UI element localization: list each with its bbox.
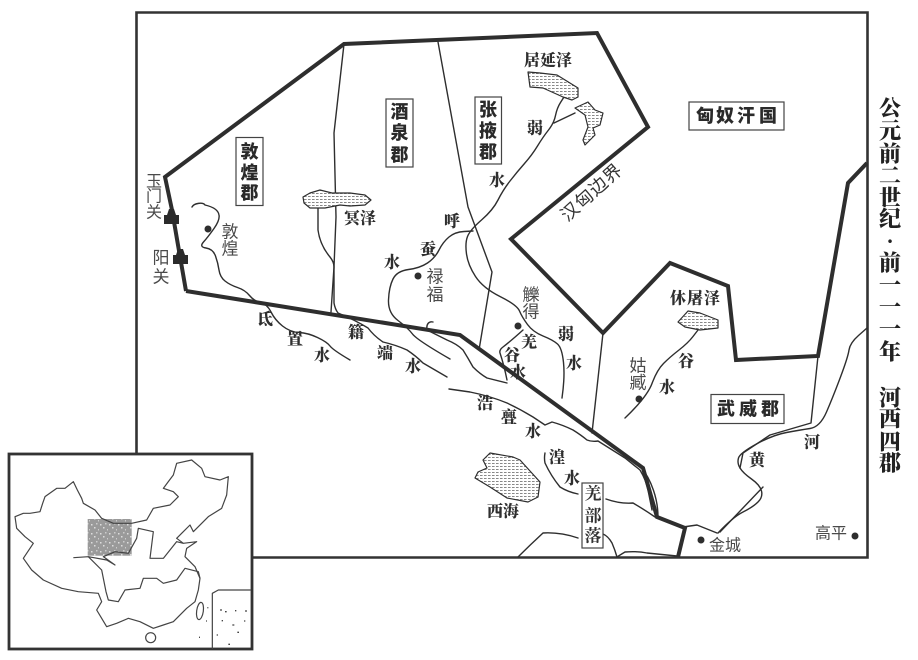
label: Dunhuang city: 敦煌 [222,222,238,258]
boundary: Dunhuang / Jiuquan [331,44,344,312]
label: Jiuquan commandery: 酒泉郡 [390,102,408,165]
label: Gu water: 谷水 [659,352,695,396]
label: Wuwei commandery: 武威郡 [717,398,779,419]
label: Zhangye commandery: 张掖郡 [479,100,497,162]
Han territory border, thick line [165,33,867,557]
label: Guzang city: 姑臧 [630,356,646,392]
icon: Yumen Pass fort [164,209,179,224]
label: Yumen Pass: 玉门关 [146,174,162,222]
dot: Lude [514,322,522,330]
river: Jiduan water [318,208,447,377]
label: Lude city: 觻得 [522,286,540,322]
dot: Guzang [636,396,642,402]
boundary: Zhangye / Wuwei [592,333,603,433]
label: Xiongnu Khanate: 匈奴汗国 [696,105,777,126]
label: Xiongnu Khanate [689,102,784,130]
lake: Juyan marsh east [575,102,603,145]
river: Ruo water branch [554,113,575,123]
settlement dots [204,226,858,544]
lake: Xiutu marsh [678,311,718,330]
label: Dunhuang commandery: 敦煌郡 [240,141,258,203]
boundary: Wuwei east [740,356,818,468]
river: Dunhuang / Dizhi water [192,203,350,360]
river: Yellow River [718,328,867,533]
label: Ruo water lower: 弱水 [558,324,582,372]
label: Dizhi water: 氐置水 [257,310,330,364]
label: Qiang valley water: 羌谷水 [504,332,537,382]
river: Ruo water [466,97,564,398]
rivers [192,97,867,557]
label: Yang Pass: 阳关 [152,248,170,286]
lake: Juyan marsh west [528,72,578,100]
river: Haomen water [449,389,652,510]
map frame [136,12,868,558]
river: Hucan water [388,231,473,359]
label: Xihai lake: 西海 [487,502,519,520]
lakes [303,72,718,502]
border: southern corridor [186,291,685,557]
label: Jiduan water: 籍端水 [348,322,421,376]
label: Haomen water: 浩亹水 [477,394,541,440]
river: Qiang valley water [500,330,523,380]
label: Wuwei commandery [711,394,784,424]
label: Hucan water: 呼蚕水 [384,212,460,272]
river: Huang water [544,453,717,533]
inset: locator map of China [9,454,252,649]
label: Zhangye commandery [475,97,502,164]
border: northern [165,33,867,360]
river: southern stream [518,533,677,557]
label: Huang water: 湟水 [549,448,580,488]
icon: Yang Pass fort [173,249,188,264]
lake: Ming marsh [303,190,371,208]
label: Xiutu marsh: 休屠泽 [670,288,720,308]
commandery boundaries [331,42,818,532]
label: Han-Xiongnu border: 汉匈边界 [557,160,626,225]
label: Jincheng city: 金城 [709,536,741,554]
label: Gaoping city: 高平 [815,524,847,542]
label: Ruo water upper: 弱水 [489,118,543,190]
river: Gu water [625,330,698,418]
label: Lufu city: 禄福 [426,268,444,304]
label: Juyan marsh: 居延泽 [524,50,572,70]
title: vertical heading: 公元前二世纪·前一一一年河西四郡 [879,96,902,476]
dot: Lufu [414,272,422,280]
label: Jiuquan commandery [386,99,413,167]
boundary: Jiuquan / Zhangye [438,42,492,350]
label: Qiang tribes: 羌部落 [584,484,602,546]
label: Yellow River: 黄河 [749,434,820,470]
label: Ming marsh: 冥泽 [344,208,376,228]
inset: highlighted region [88,519,132,556]
lake: Xihai [475,453,540,502]
dot: Jincheng [698,536,704,544]
label: Dunhuang commandery [236,138,263,206]
dot: Gaoping [852,532,858,540]
river: minor tributary [427,322,507,383]
border: thin parallel line [640,466,658,517]
dot: Dunhuang [204,226,212,232]
inset: China outline [15,460,251,649]
boundary: southeast [720,487,763,532]
